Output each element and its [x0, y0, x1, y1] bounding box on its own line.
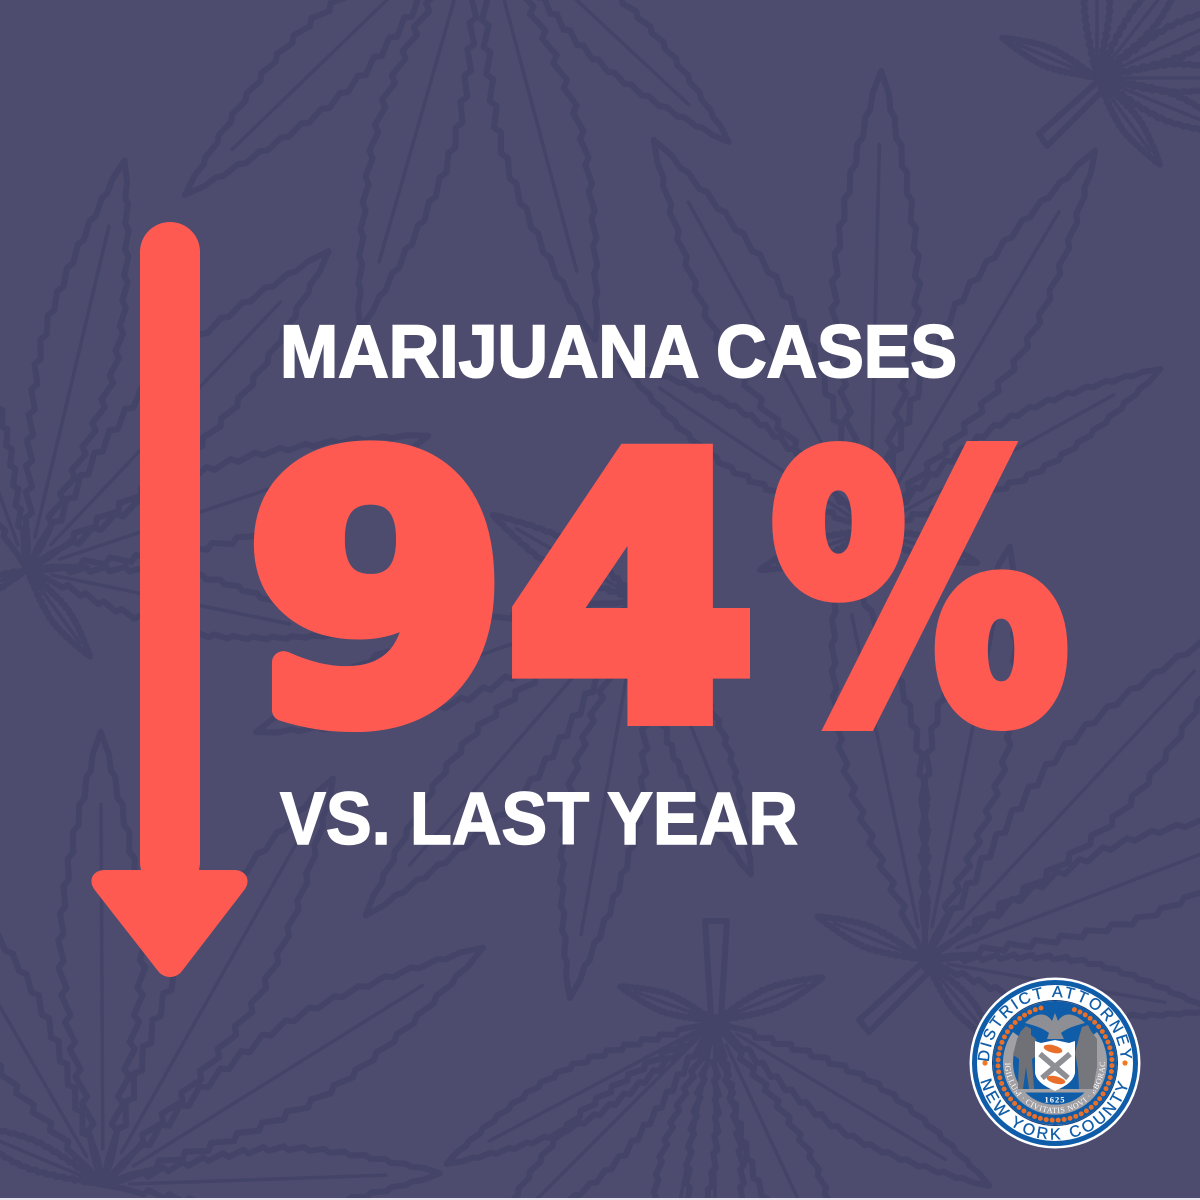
right figure [1075, 1025, 1097, 1089]
heading: marijuana cases: MARIJUANA CASES [280, 310, 957, 393]
shield [1035, 1040, 1075, 1091]
percent sign: % [771, 386, 1069, 801]
seal: District Attorney New York County [970, 978, 1140, 1148]
left figure [1013, 1026, 1036, 1089]
year: 1625 [1044, 1094, 1066, 1104]
eagle [1025, 1013, 1085, 1039]
platform [1017, 1089, 1093, 1092]
motto band [1008, 1035, 1102, 1110]
digit 9: 9 [246, 385, 507, 801]
windmill sails [1040, 1054, 1070, 1078]
subheading: vs. last year: VS. LAST YEAR [280, 777, 798, 860]
seal: District Attorney New York County: NEW YORK COUNTY [980, 1078, 1128, 1140]
digit 4: 4 [507, 385, 755, 800]
motto: SIGILLUM · CIVITATIS NOVI · EBORACI [1005, 1062, 1106, 1113]
arrow: downward [91, 222, 248, 977]
big number: 94% [246, 385, 1069, 801]
seal ring text: DISTRICT ATTORNEY [978, 986, 1132, 1061]
bead ring [998, 1008, 1112, 1120]
beavers [1043, 1043, 1063, 1055]
